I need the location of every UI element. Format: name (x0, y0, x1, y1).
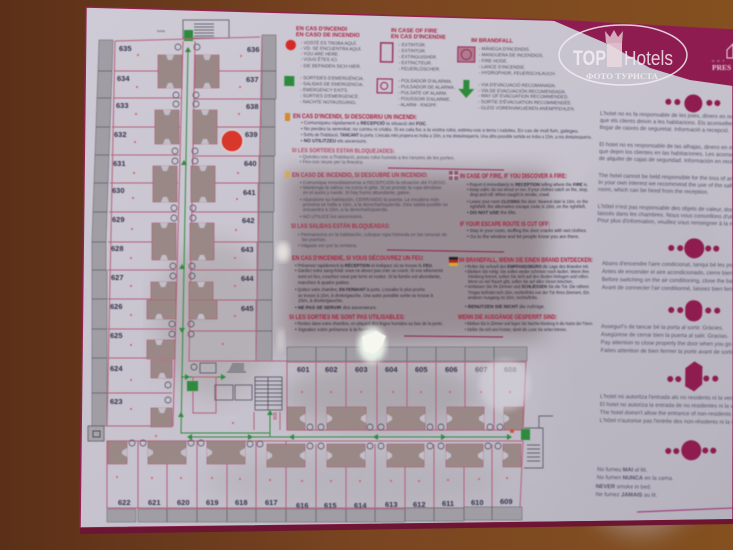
legend: you are here: - YOU ARE HERE. (301, 51, 339, 57)
instructions: German: • BENUTZEN SIE NICHT die Aufzüge. (465, 304, 545, 309)
instructions: Spanish: en el suelo y ruede. Si hay humo abundante, gatee. (303, 190, 410, 195)
legend: extinguisher and alarm: EN CAS D'INCENDIE (391, 34, 446, 41)
legend: you are here: - SORTIDES D'EMERGÈNCIA. (300, 74, 364, 81)
wing room numbers: 632 (114, 130, 127, 139)
legend: extinguisher and alarm: - POUSSOIR D'ALARME. (398, 96, 451, 102)
instructions: German: WENN DIE AUSGÄNGE GESPERRT SIND: (458, 314, 557, 321)
wing room numbers: 642 (242, 216, 255, 225)
legend (284, 26, 576, 111)
lower room numbers: 619 (206, 498, 219, 507)
you are here marker (221, 130, 243, 152)
lower room numbers: 621 (148, 498, 161, 507)
wing room numbers: 639 (245, 130, 258, 139)
instructions: French: • Quittez votre chambre, EN FERMANT la porte. L'escalier le plus proche (295, 287, 425, 292)
instructions: Catalan: • NO UTILITZEU els ascensors. (301, 138, 367, 144)
instructions: French: sont en feu, couchez vous par terre et roulez. Si la fumée est abondante, (298, 274, 441, 279)
wing room numbers: 626 (110, 302, 123, 311)
right column: no smoking: No fumeu MAI al llit. (597, 467, 648, 474)
right column: no smoking: NEVER smoke in bed. (596, 484, 652, 491)
instructions: Spanish: • Comunique inmediatamente a RECEPCIÓN la situación del FUEGO. (300, 179, 446, 185)
wing room numbers: 643 (241, 245, 254, 254)
lower room numbers: 617 (265, 498, 278, 507)
legend: hose and route: - HYDROPHOR, FEUERSCHLAUCH. (479, 70, 556, 76)
legend: hose and route: - WAY OF EVACUATION RECOMMENDED. (478, 93, 569, 99)
upper room numbers: 604 (385, 365, 398, 374)
legend: extinguisher and alarm: - FEUERLÖSCHER. (398, 65, 440, 72)
legend: you are here: - NACHTE NOTAUSGANG. (300, 99, 357, 105)
upper room numbers: 605 (415, 365, 428, 374)
upper room numbers: 606 (445, 365, 458, 374)
instructions: Catalan: EN CAS D'INCENDI, SI DESCOBRIU UN INCENDI: (293, 113, 417, 121)
legend: hose and route (457, 38, 576, 111)
upper room numbers: 608 (504, 365, 517, 374)
upper room numbers: 607 (475, 365, 488, 374)
instructions: English: • DO NOT USE the lifts. (467, 210, 517, 215)
legend: you are here (284, 26, 365, 105)
legend: extinguisher and alarm: - EXTINGUISHER. (399, 54, 437, 60)
wing room numbers: 625 (110, 331, 123, 340)
instructions: English (449, 171, 588, 239)
right wing rooms (189, 37, 262, 361)
lower room numbers: 610 (471, 498, 484, 507)
instructions: German: • Bleiben Sie in Zimmer und legen Sie Nachte-Kleidung in die Nutze der Türen. (465, 321, 593, 326)
instructions: English: right/left; the alternative escape route is 15m, on the right/left. (470, 204, 586, 209)
instructions: French: SI LES SORTIES NE SONT PAS UTILISABLES: (289, 315, 405, 321)
instructions: Spanish: encuentra a 15m, a la derecha/izquierda. (303, 207, 388, 212)
maroon header corner (552, 20, 733, 86)
legend: extinguisher and alarm (377, 28, 456, 108)
top stairwell: Sortida (157, 30, 166, 33)
instructions: German: • Stellen Sie sich ans Fenster, damit die Leute Sie sehen können. (465, 327, 567, 332)
instructions: French: • NE PAS SE SERVIR des ascenseurs. (295, 305, 377, 310)
instructions: Spanish: próxima se halla a 15m, a la derecha/izquierda. Otra salida posible se (303, 202, 448, 207)
instructions: German: IM BRANDFALL, WENN SIE EINEN BRAND ENTDECKEN: (459, 257, 593, 264)
instructions: English: drop and roll. When caught in smoke, crawl. (470, 192, 550, 197)
right column: no smoking (596, 439, 716, 500)
legend: extinguisher and alarm: - POLSADOR D'ALARMA. (398, 78, 452, 84)
hotel logo: HOT (712, 59, 727, 63)
wing doors (165, 44, 200, 403)
legend: you are here: - EMERGENCY EXITS. (300, 87, 348, 93)
instructions: French (289, 253, 444, 332)
left balconies (92, 40, 113, 426)
wing room numbers: 623 (110, 397, 123, 406)
watermark: TOP Hotels: Hotels (624, 48, 673, 70)
instructions: English: • Report it immediately to RECEPTION telling where the FIRE is. (467, 182, 588, 187)
glare highlights (276, 242, 531, 411)
legend: extinguisher and alarm: IN CASE OF FIRE (391, 28, 438, 35)
wing room numbers: 633 (116, 101, 129, 110)
wing room numbers: 640 (244, 159, 257, 168)
wing room numbers: 645 (241, 304, 254, 313)
lower room numbers (118, 497, 513, 510)
right column: door (601, 299, 733, 356)
instructions: German: anderer Ausgang ist 15m, rechts/links. (468, 295, 538, 300)
instructions: German: • Bleiben Sie ruhig: Sie sollen weder schreien noch laufen. Wenn Ihre (465, 269, 589, 274)
photo glare shading (155, 155, 733, 535)
lower room numbers: 609 (500, 497, 513, 506)
instructions: French: 15m, à droite/gauche. (298, 298, 343, 303)
legend: hose and route: - FIRE HOSE. (479, 58, 508, 64)
instructions: Catalan: • Sortiu de l'habitació, TANCANT la porta. L'escala més propera es troba a 15m, a ma dreta/esquerra. Una altra possible sortida es troba a 15m, a ma dreta/esquerra. (301, 132, 592, 140)
lower room numbers: 612 (413, 500, 426, 509)
instructions: English: • Stay in your room, stuffing the door cracks with wet clothes. (467, 228, 587, 233)
legend: you are here: - VOUS ÊTES ICI. (301, 55, 338, 62)
legend: extinguisher and alarm: - EXTINTOR. (399, 48, 426, 54)
wing room numbers: 628 (111, 244, 124, 253)
divider line (387, 250, 504, 252)
lower room numbers: 611 (442, 499, 454, 508)
instructions: French: • Signalez votre présence à la fenêtre. (295, 327, 374, 332)
legend: you are here: - SALIDAS DE EMERGENCIA. (300, 81, 364, 87)
instructions: English: • Keep calm: do not shout or run. If your clothes catch on fire, stop, (467, 187, 588, 192)
instructions: Spanish: • NO UTILICE los ascensores. (300, 214, 363, 219)
divider line (404, 336, 503, 337)
instructions: German: Kleidung brennt, sollen Sie sich auf den Boden hinlegen und rollen. (468, 274, 589, 279)
instructions: French: marchez à quatre pattes. (298, 280, 350, 285)
wing room numbers: 638 (246, 102, 259, 111)
instructions: French: • Prévenez rapidement la RÉCEPTION et indiquez où se trouve le FEU. (295, 261, 433, 268)
small stair left (88, 426, 104, 441)
wing room numbers: 636 (247, 45, 260, 54)
instructions: German: • Rufen Sie schnell den EMPFANGSBÜRO die Lage des Brandes mit. (465, 263, 589, 269)
wing room numbers (110, 44, 260, 406)
legend: you are here: - SIE BEFINDEN SICH HIER. (300, 63, 361, 69)
legend: hose and route: - GLEIS VORENVAKUIEREN ANEMPFEHLEN. (478, 105, 575, 111)
bottom right line (637, 508, 733, 512)
legend: you are here: - VD. SE ENCUENTRA AQUÍ. (301, 45, 362, 52)
instructions: French: se trouve à 15m, à droite/gauche. Une autre possible sortie se trouve à (298, 293, 433, 298)
floor plan (88, 20, 553, 522)
instructions: Spanish (285, 171, 448, 248)
instructions: Spanish: • Permanezca en la habitación, coloque ropa húmeda en las ranuras de (298, 232, 447, 237)
lower room numbers: 618 (235, 498, 248, 507)
instructions: Catalan: • Quedeu-vos a l'habitació, posau roba humida a les ranures de les portes. (300, 154, 455, 160)
evacuation route (178, 47, 512, 440)
right balconies (256, 35, 276, 361)
watermark: TOP Hotels: ФОТО ТУРИСТА (586, 72, 658, 81)
upper room numbers: 601 (297, 365, 310, 374)
room sensor dots (116, 54, 511, 482)
instructions: Catalan: • Feu-vos veure per la finestra. (300, 159, 364, 165)
legend: you are here: EN CAS D'INCENDI (296, 26, 348, 33)
central services core (187, 361, 287, 430)
legend: you are here: EN CASO DE INCENDIO (296, 32, 360, 39)
instructions: Spanish: las puertas. (302, 237, 326, 242)
instructions: French: EN CAS D'INCENDIE, SI VOUS DÉCOUVREZ UN FEU: (292, 253, 424, 262)
lower room numbers: 620 (177, 498, 190, 507)
instructions: German: Wenn es viel Rauch gibt, sollen Sie auf allen Vieren kriechen. (468, 279, 573, 284)
east stair (510, 416, 553, 468)
instructions: German (449, 257, 593, 332)
right column: valuables (597, 92, 733, 228)
right column: valuables: llogar de caixes de seguretat. Informació a recepció. (600, 125, 730, 134)
upper room block (287, 347, 527, 430)
lower room block (107, 440, 523, 522)
hotel logo (712, 44, 733, 72)
lower room numbers: 615 (324, 501, 337, 510)
instructions: Spanish: EN CASO DE INCENDIO, SI DESCUBRE UN INCENDIO: (292, 172, 428, 179)
right column: no smoking: No fumen NUNCA en la cama. (597, 475, 674, 482)
wing room numbers: 644 (241, 274, 254, 283)
wing room numbers: 634 (117, 74, 130, 83)
lower room numbers: 622 (118, 498, 131, 507)
legend: extinguisher and alarm: - PULSATE OF ALARM. (398, 90, 447, 96)
wing room numbers: 627 (111, 273, 124, 282)
instructions: English: • Go to the window and let people know you are there. (467, 234, 579, 239)
divider line (388, 168, 504, 170)
instructions: Spanish: • Abandone su habitación, CERRANDO la puerta. La escalera más (300, 197, 440, 202)
instructions: German: • Verlassen Sie Ihr Zimmer und SCHLIESSEN Sie die Tür. Die nähere (465, 284, 589, 289)
legend: hose and route: IM BRANDFALL (471, 38, 514, 45)
wing room numbers: 635 (119, 44, 132, 53)
instructions: English: • Leave your room CLOSING the door. Nearest stair is 15m, on the (467, 199, 588, 204)
legend: you are here: - SORTIES D'EMERGENCE. (300, 93, 359, 99)
upper room numbers: 602 (325, 365, 338, 374)
lower room numbers: 616 (296, 501, 309, 510)
right column: valuables: room, which can be hired from the reception. (598, 187, 709, 196)
lower room numbers: 614 (354, 501, 367, 510)
wing room numbers: 631 (113, 159, 126, 168)
right column: no smoking: Ne fumez JAMAIS au lit. (596, 492, 658, 499)
legend: extinguisher and alarm: - ALARM - KNOPF. (398, 102, 437, 108)
legend: hose and route: - LANCE D'INCENDIE. (479, 64, 525, 70)
hotel logo: PRES (712, 63, 731, 72)
instructions: English: IF YOUR ESCAPE ROUTE IS CUT OFF: (460, 222, 550, 228)
watermark: TOP Hotels: TOP (573, 47, 606, 70)
bathrooms of wing (147, 55, 219, 427)
instructions: French: • Gardez votre sang-froid: vous ne devez pas crier ou courir. Si vos vêtements (295, 268, 444, 273)
right column: door: Asegúrese de cerrar bien la puerta al salir. Gracias. (601, 332, 729, 340)
wing room numbers: 629 (112, 215, 125, 224)
wing room numbers: 630 (112, 186, 125, 195)
legend: you are here: - VOSTÈ ES TROBA AQUÍ. (301, 39, 357, 46)
instructions: Spanish: SI LAS SALIDAS ESTÁN BLOQUEADAS: (291, 223, 390, 230)
legend: extinguisher and alarm: - EXTINTOR. (399, 42, 426, 48)
instructions: Catalan: • No perdeu la serenitat; no correu ni cridéu. Si es cala foc a la vostra roba, estireu-vos a terra i rodoleu. En cas de molt fum, gategeu. (301, 126, 579, 134)
instructions: English: IN CASE OF FIRE, IF YOU DISCOVER A FIRE: (460, 173, 567, 180)
emergency exit top (184, 30, 193, 41)
legend: extinguisher and alarm: - PULSADOR DE ALARMA. (398, 84, 455, 90)
wing room numbers: 641 (243, 188, 256, 197)
upper room numbers (297, 365, 517, 374)
right column: air conditioning (602, 237, 733, 293)
wing room numbers: 624 (110, 364, 123, 373)
watermark: TOP Hotels (559, 25, 687, 85)
wing room numbers: 637 (246, 75, 259, 84)
instructions: Catalan: • Comuniqueu ràpidament a RECEPCIÓ la situació del FOC. (301, 118, 427, 126)
legend: hose and route: - VÍA DE EVACUACIÓN RECOMENDADA. (478, 87, 566, 94)
upper room numbers: 603 (355, 365, 368, 374)
instructions: Spanish: • Mantenga la calma: no corra ni grite. Si se prende la ropa tiéndase (300, 185, 442, 190)
lower room numbers: 613 (385, 500, 398, 509)
right column: no entry (600, 360, 733, 426)
left wing rooms (107, 37, 260, 426)
instructions: Spanish: • Hágase ver por la ventana. (298, 243, 357, 248)
instructions: German: Treppe befindet sich 15m, rechts/links von der Tür Ihres Zimmers. Ein (468, 290, 589, 295)
bottom edge band (80, 519, 733, 534)
instructions: Catalan: SI LES SORTIDES ESTAN BLOQUEJADES: (292, 148, 395, 155)
legend: hose and route: - MÀNEGA D'INCENDIS. (479, 45, 530, 52)
legend: hose and route: - MANGUERA DE INCENDIOS. (479, 52, 544, 58)
instructions: Catalan (285, 113, 592, 167)
legend: hose and route: - SORTIE D'ÉVACUATION RECOMMENDÉE. (478, 98, 572, 105)
top stairwell (157, 20, 229, 38)
right column: door: Assegurí's de tancar bé la porta al sortir. Gràcies. (601, 324, 724, 332)
legend: extinguisher and alarm: - EXTINCTEUR. (399, 60, 432, 66)
instructions: French: • Restez dans votre chambre, en plaçant des linges humides au bas de la porte. (295, 321, 443, 326)
legend: hose and route: - VIA D'EVACUACIÓ RECOMANADA. (478, 81, 556, 88)
